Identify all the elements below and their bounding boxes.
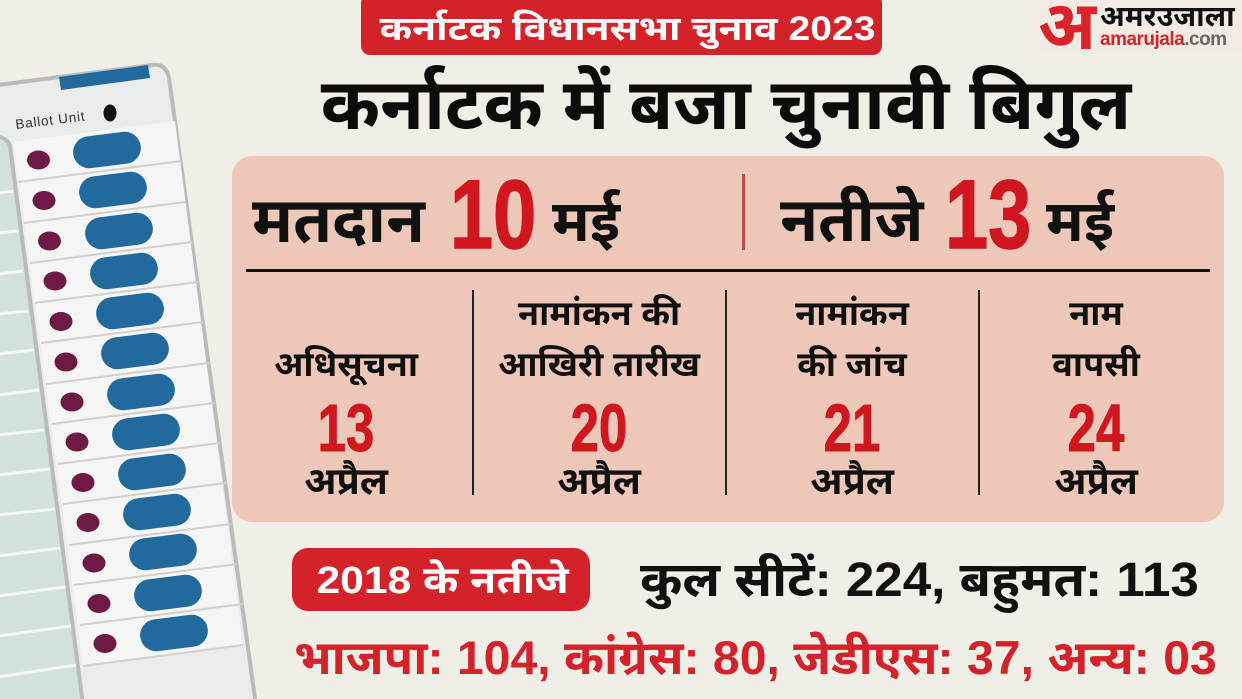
panel: election schedule [232,156,1224,522]
date: nomination scrutiny: अप्रैल [810,461,894,503]
label: Ballot Unit: Ballot Unit [15,109,86,132]
date: last date for nomination: नामांकन की [518,295,680,333]
polling date: मई [552,189,620,254]
logo: Amar Ujala: अमरउजाला [1100,1,1235,33]
polling date: 10 [450,160,536,269]
icons: indicator lights [27,150,116,653]
date: nomination scrutiny [795,295,910,503]
date: nomination scrutiny: नामांकन [795,295,909,333]
date: withdrawal: नाम [1069,295,1123,333]
top banner: election label [361,0,882,55]
logo: Amar Ujala [1036,0,1242,54]
text: party results: भाजपा: 104, कांग्रेस: 80, जेडीएस: 37, अन्य: 03 [294,631,1217,684]
polling date [252,160,621,269]
divider: polling and result [742,174,745,250]
badge: 2018 results: 2018 के नतीजे [317,560,569,602]
date: last date for nomination: 20 [571,391,627,466]
result date [780,160,1115,269]
result date: 13 [945,160,1031,269]
polling date: मतदान [252,186,425,256]
icon: blue bar [59,65,150,90]
illustration: EVM ballot unit [0,62,257,699]
icons: candidate buttons [71,130,210,653]
main title: कर्नाटक में बजा चुनावी बिगुल [321,65,1131,145]
logo: Amar Ujala: amarujala.com [1100,29,1227,50]
result date: मई [1046,189,1114,254]
date: notification: अप्रैल [304,461,388,503]
date: nomination scrutiny: 21 [824,391,880,466]
icon: black indicator [104,104,116,122]
date: notification [274,345,419,503]
date: nomination scrutiny: की जांच [797,346,907,384]
date: withdrawal [1052,295,1140,503]
date: last date for nomination: अप्रैल [557,461,641,503]
date: withdrawal: अप्रैल [1054,461,1138,503]
result date: नतीजे [780,186,924,255]
badge: 2018 results [292,548,590,611]
date: withdrawal: 24 [1068,391,1124,466]
date: last date for nomination [498,294,700,503]
date: notification: अधिसूचना [274,346,418,384]
date: notification: 13 [318,391,374,466]
date: withdrawal: वापसी [1052,346,1140,384]
top banner: election label: कर्नाटक विधानसभा चुनाव 2023 [380,10,875,48]
text: total seats and majority: कुल सीटें: 224, बहुमत: 113 [640,554,1199,607]
date: last date for nomination: आखिरी तारीख [498,346,700,384]
